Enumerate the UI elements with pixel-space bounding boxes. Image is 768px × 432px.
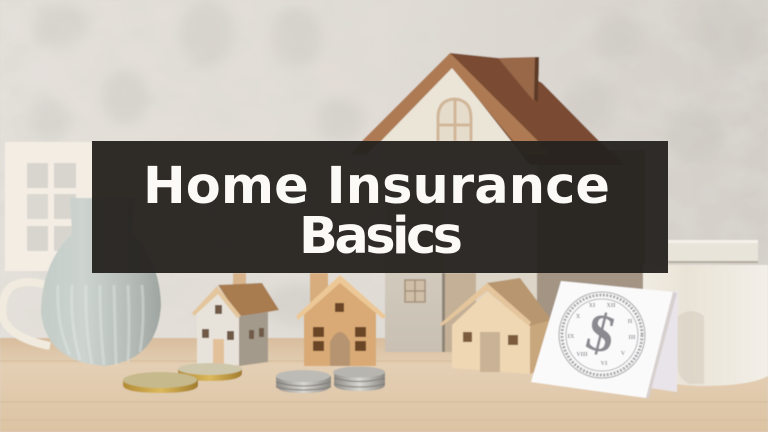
decorative white window frame — [5, 142, 95, 271]
title line 2: Basics — [299, 207, 463, 266]
large model house — [350, 53, 645, 352]
wooden table — [0, 338, 768, 432]
title banner — [92, 141, 668, 273]
icon: dollar coin seal: $ — [581, 301, 621, 365]
title — [143, 157, 610, 266]
storage jar — [643, 240, 768, 386]
icon: dollar coin seal: VI — [601, 361, 608, 367]
small white model house — [192, 273, 279, 366]
silver coin stacks — [276, 366, 385, 393]
icon: dollar coin seal — [559, 292, 645, 378]
icon: dollar coin seal: IX — [568, 334, 575, 340]
icon: dollar coin seal: XI — [589, 303, 596, 309]
light wooden model house — [440, 278, 553, 374]
icon: dollar coin seal: II — [628, 319, 633, 325]
icon: dollar coin seal: X — [576, 314, 581, 320]
icon: dollar coin seal: V — [621, 351, 626, 357]
gold coins — [123, 363, 242, 393]
wooden model house — [296, 273, 386, 366]
cup handle — [2, 282, 50, 346]
dollar sign card — [531, 281, 678, 398]
ribbed ceramic vase — [41, 198, 161, 366]
icon: dollar coin seal: XII — [606, 303, 616, 309]
title line 1: Home Insurance — [143, 157, 610, 216]
icon: dollar coin seal: III — [628, 335, 636, 341]
icon: dollar coin seal: VIII — [576, 352, 588, 358]
